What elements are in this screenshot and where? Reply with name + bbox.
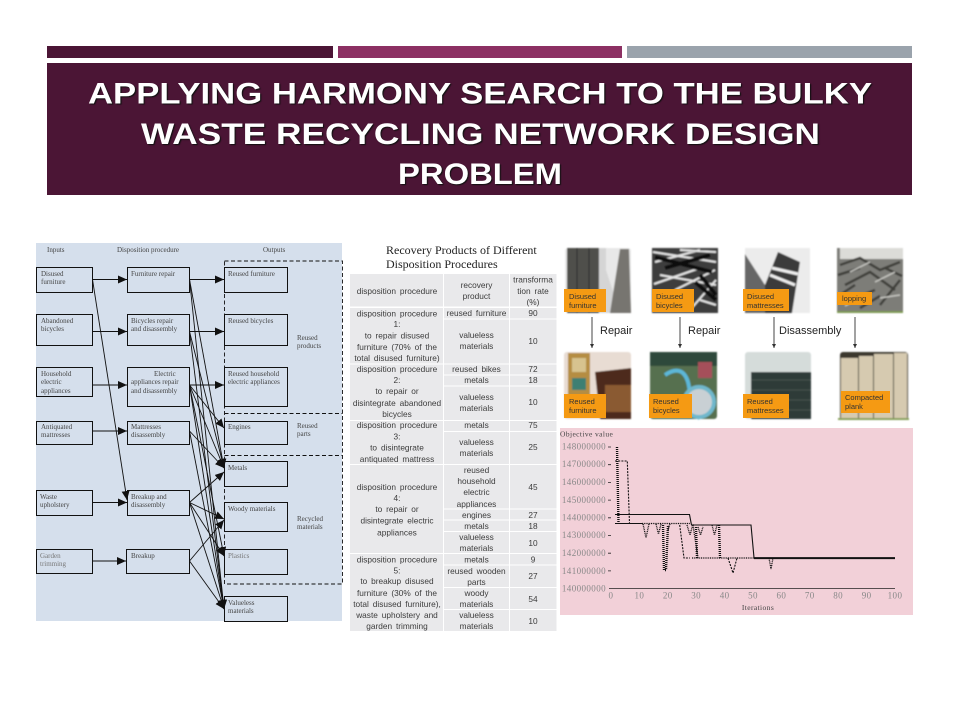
photo: disused furniture [564,248,631,313]
column 3 text: 10 [528,538,538,548]
column headings: Outputs [263,246,285,254]
group outlines [224,261,342,584]
column 1 text: disintegrate abandoned [353,398,442,408]
column 2 text: reused [464,465,490,475]
process boxes: and disassembly [131,325,178,333]
arrow: disassembly: Disassembly [779,325,842,337]
series: dotted line [642,524,773,569]
x axis labels: 70 [805,590,815,600]
panel: photo flow [564,248,909,420]
process boxes: Breakup [131,552,155,560]
column 2 text: woody [464,588,489,598]
column 1 text: disposition procedure [357,364,438,374]
output boxes: Reused bicycles [228,317,274,325]
arrow: disassembly [774,317,842,348]
output group labels: materials [297,523,323,531]
column 2 text: product [463,291,491,301]
title banner: APPLYING HARMONY SEARCH TO THE BULKY [88,78,872,110]
photo: compacted plank [838,352,909,420]
output boxes: Plastics [228,552,250,560]
panel: convergence line chart [560,428,913,615]
column 3 text: 9 [531,554,536,564]
input boxes: furniture [41,278,66,286]
photo: reused mattresses: mattresses [747,406,784,415]
input boxes: appliances [41,387,71,395]
photo: reused bicycles: bicycles [653,406,680,415]
title banner: WASTE RECYCLING NETWORK DESIGN [141,118,820,151]
y axis labels: 148000000 [562,442,606,452]
column 2 text: reused furniture [447,308,507,318]
output boxes: Engines [228,423,251,431]
output group labels [297,334,324,531]
x axis labels: 0 [609,590,614,600]
input boxes: mattresses [41,431,70,439]
column 2 text: valueless [459,532,494,542]
column 2 text: recovery [461,280,493,290]
input boxes: Garden [40,552,61,560]
column 1 text: to repair or [375,504,419,514]
input boxes: upholstery [40,501,70,509]
photo: disused mattresses [743,248,810,313]
column 1 text: disposition procedure [357,286,438,296]
column 2 text: materials [460,621,493,631]
photo: disused mattresses: Disused [747,292,774,301]
series: thick dotted bands [617,447,720,570]
column 2 text: metals [464,554,489,564]
column 1 text: disposition procedure [357,308,438,318]
input boxes: bicycles [41,325,64,333]
column 1 text: furniture (70% of the [357,342,437,352]
photo: reused mattresses [743,352,811,419]
process boxes: disassembly [131,431,166,439]
title banner [47,63,912,195]
output boxes: Reused furniture [228,270,275,278]
x axis labels: 90 [862,590,872,600]
column 3 text: transforma [513,274,553,284]
series: flat tail [754,558,895,560]
column 2 text: materials [460,543,493,553]
y axis labels: 140000000 [562,584,606,594]
column 1 text: to disintegrate [370,442,424,452]
column 1 text: 1: [394,319,400,329]
x axis labels: Iterations [742,603,774,612]
photo: disused mattresses: mattresses [747,301,784,310]
photo: compacted plank: plank [845,402,863,411]
x axis labels: 10 [634,590,644,600]
column 3 text: 18 [528,521,538,531]
column 3 text: 27 [528,510,538,520]
photo: reused mattresses: Reused [747,397,773,406]
column 3 text: 90 [528,308,538,318]
photo: reused furniture [564,352,631,419]
table cells [350,274,556,631]
process boxes: Furniture repair [131,270,176,278]
column 2 text: metals [464,521,489,531]
x axis labels [609,590,902,612]
arrow: repair bicycles: Repair [688,325,721,337]
process boxes: Mattresses [131,423,161,431]
column 3 text: 27 [528,571,538,581]
table: recovery products [350,274,556,631]
column 1 text: disposition procedure [357,554,438,564]
table heading [386,243,537,271]
process boxes: Electric [154,370,176,378]
column 3 text: 18 [528,375,538,385]
output boxes: Reused household [228,370,280,378]
column 2 text: materials [460,599,493,609]
photo: disused furniture: Disused [569,292,596,301]
series: solid line [615,514,895,558]
column 2 text [447,280,507,631]
column 2 text: valueless [459,392,494,402]
column 3 text [513,274,553,626]
column 3 text: 10 [528,397,538,407]
column 1 text: bicycles [382,409,412,419]
x axis labels: 100 [888,590,902,600]
column 1 text: total disused furniture), [353,599,441,609]
column 2 text: electric [463,487,490,497]
column 3 text: tion rate [517,286,549,296]
output boxes: electric appliances [228,378,280,386]
column 1 text: to repair disused [365,330,430,340]
column 1 text: 5: [394,566,400,576]
arrow: lopping to plank [854,317,856,348]
y axis labels: 144000000 [562,512,606,522]
column 2 text: parts [467,577,486,587]
process boxes [126,268,190,574]
output boxes: materials [228,607,254,615]
output group labels: products [297,342,321,350]
input boxes: Abandoned [41,317,74,325]
input boxes: Waste [40,493,57,501]
column 1 text: appliances [377,528,417,538]
column 2 text: materials [460,341,493,351]
table heading: Recovery Products of Different [386,243,537,257]
y axis labels: 146000000 [562,477,606,487]
column 1 text: to breakup disused [360,576,434,586]
column 3 text: 10 [528,616,538,626]
photo: compacted plank: Compacted [845,393,883,402]
axis title: objective value: Objective value [560,430,614,438]
arrow: repair bicycles [680,317,721,348]
column 1 text: antiquated mattress [360,454,434,464]
column 1 text: disposition procedure [357,482,438,492]
x axis labels: 50 [748,590,758,600]
column headings: Inputs [47,246,65,254]
column 3 text: 25 [528,442,538,452]
column 1 text: total disused furniture) [354,353,440,363]
input boxes: Disused [41,270,64,278]
column 1 text: 2: [394,375,400,385]
column 1 text: disintegrate electric [360,516,434,526]
y axis labels: 141000000 [562,566,606,576]
x axis labels: 20 [663,590,673,600]
y axis labels: 142000000 [562,548,606,558]
process boxes: and disassembly [131,387,178,395]
output boxes [224,268,288,622]
column 3 text: 54 [528,594,538,604]
column 3 text: 72 [528,364,538,374]
x axis labels: 40 [720,590,730,600]
top accent bars [47,46,912,58]
column 2 text: appliances [457,499,496,509]
input boxes: Antiquated [41,423,73,431]
column 2 text: valueless [459,610,494,620]
column headings: Disposition procedure [117,246,179,254]
input boxes: trimming [40,560,67,568]
photo: disused bicycles [652,248,718,313]
table heading: Disposition Procedures [386,257,498,271]
column 3 text: 45 [528,482,538,492]
column 1 text: garden trimming [366,621,428,631]
process boxes: Breakup and [131,493,167,501]
column 2 text: metals [464,375,489,385]
column 1 text [353,286,442,631]
photo: reused bicycles [649,352,717,419]
process boxes: Bicycles repair [131,317,174,325]
arrow: repair furniture: Repair [600,325,633,337]
column 2 text: valueless [459,437,494,447]
column 3 text: 10 [528,336,538,346]
title banner: PROBLEM [398,158,562,191]
photo: reused bicycles: Reused [653,397,679,406]
photo: lopping [837,248,903,313]
column 1 text: to repair or [375,386,419,396]
column headings [47,246,285,254]
column 1 text: furniture (30% of the [357,588,437,598]
column 1 text: waste upholstery and [355,610,438,620]
output boxes: Metals [228,464,247,472]
column 2 text: reused wooden [447,566,506,576]
output group labels: Recycled [297,515,324,523]
column 3 text: 75 [528,420,538,430]
x axis labels: 60 [776,590,786,600]
column 2 text: reused bikes [452,364,501,374]
column 2 text: household [457,476,496,486]
output boxes: Valueless [228,599,255,607]
output group labels: Reused [297,422,318,430]
column 2 text: materials [460,448,493,458]
x axis labels: 30 [691,590,701,600]
arrow: repair furniture [592,317,633,348]
process boxes: disassembly [131,501,166,509]
y axis labels [562,442,606,594]
column 2 text: engines [462,510,491,520]
column 2 text: metals [464,420,489,430]
column 2 text: materials [460,403,493,413]
column 1 text: 4: [394,493,400,503]
photo: disused bicycles: bicycles [656,301,683,310]
input boxes: Household [41,370,72,378]
y axis labels: 145000000 [562,495,606,505]
output group labels: Reused [297,334,318,342]
column 3 text: (%) [527,297,540,307]
panel: network flow diagram [36,243,342,622]
input boxes: electric [41,378,62,386]
column 1 text: 3: [394,432,400,442]
series: dash-dot line [615,461,737,573]
photo: reused furniture: furniture [569,406,597,415]
photo: disused furniture: furniture [569,301,597,310]
column 1 text: disposition procedure [357,420,438,430]
process boxes: appliances repair [131,378,179,386]
column 2 text: valueless [459,330,494,340]
arrows [92,280,224,609]
x axis labels: 80 [833,590,843,600]
y axis labels: 147000000 [562,459,606,469]
photo: lopping: lopping [842,294,866,303]
output group labels: parts [297,430,311,438]
input boxes [36,268,92,574]
photo: reused furniture: Reused [569,397,595,406]
output boxes: Woody materials [228,505,276,513]
y axis labels: 143000000 [562,530,606,540]
axes [608,447,895,588]
photo: disused bicycles: Disused [656,292,683,301]
